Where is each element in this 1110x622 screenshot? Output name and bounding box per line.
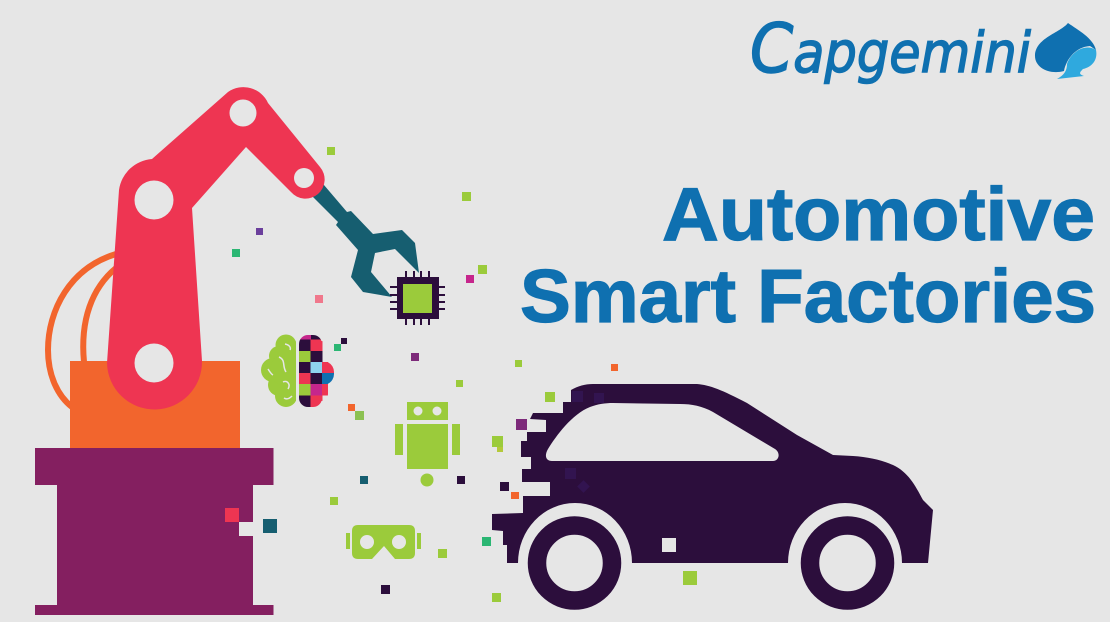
arm joints [134,100,314,382]
title line 1: Automotive [662,172,1095,256]
purple base [35,448,274,615]
car body [492,384,933,563]
icon: VR headset [346,525,421,559]
icon: android robot [395,402,460,486]
car body pixel accents [565,391,604,493]
icon: microchip [390,271,445,325]
floating pixels [225,147,697,602]
logo: Capgemini [750,10,1096,89]
red arm [107,87,325,409]
front wheel [537,526,612,600]
logo wordmark: Capgemini [750,10,1031,89]
green brain half [261,334,296,407]
orange pedestal [70,361,240,449]
pixel brain half [299,335,334,408]
title line 2: Smart Factories [520,254,1096,338]
car white pixel [662,538,676,552]
title [520,172,1096,338]
car [492,384,933,600]
logo spade icon [1035,23,1096,79]
icon: brain [261,334,334,408]
cables [48,254,116,407]
robot arm machine [35,87,419,615]
rear wheel [810,526,885,600]
teal gripper [306,178,419,297]
